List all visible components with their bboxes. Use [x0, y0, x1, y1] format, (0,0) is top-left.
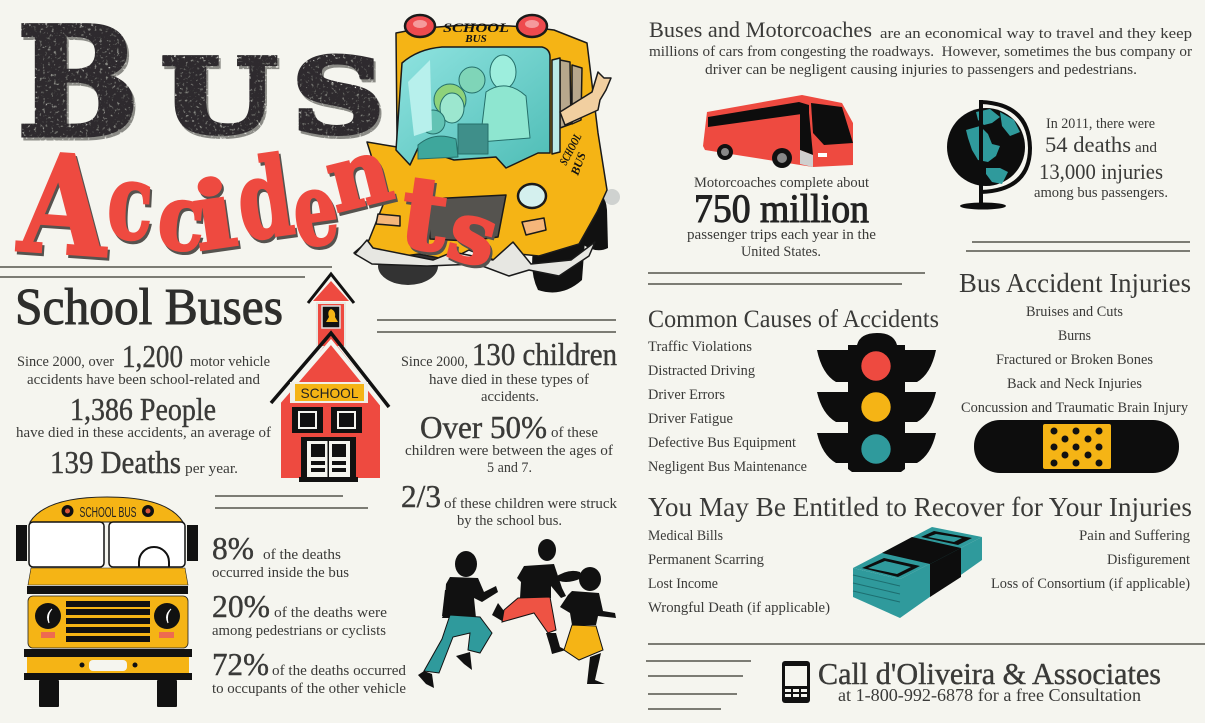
windshield with passengers: [396, 47, 550, 168]
list: injuries: Burns: [1058, 328, 1091, 344]
list: recoverable damages, left: [648, 528, 830, 616]
crumpled bumper: [355, 240, 595, 276]
text block: percentage of deaths: of the deaths occurred: [272, 663, 406, 679]
text block: percentage of deaths: 8%: [212, 530, 254, 566]
title: Accidents: i: [186, 159, 243, 272]
mirrors: [16, 525, 198, 561]
call to action: at 1-800-992-6878 for a free Consultation: [838, 685, 1141, 705]
headlight: [518, 184, 546, 208]
list: causes: Driver Fatigue: [648, 411, 733, 427]
list: recoverable damages, left: Medical Bills: [648, 528, 723, 544]
text block: motorcoach trips: [687, 175, 876, 260]
text block: intro paragraph: Buses and Motorcoaches: [649, 17, 872, 42]
child one: [418, 551, 498, 688]
text block: percentage of deaths: 20%: [212, 588, 270, 624]
text block: school accident statistics: accidents have been school-related and: [27, 372, 260, 388]
text block: school accident statistics: motor vehicle: [190, 354, 270, 370]
text block: 2011 bus statistics: [1034, 116, 1168, 201]
text block: children statistics: [401, 336, 617, 529]
letter B: B: [17, 0, 139, 171]
bus body: [354, 25, 607, 262]
title: Accidents: A: [13, 123, 116, 289]
title: Bus: [17, 0, 384, 171]
title: Accidents: n: [316, 116, 401, 232]
bus roof: [30, 497, 183, 522]
text block: children statistics: 2/3: [401, 478, 441, 514]
icon: stack of money: [853, 527, 982, 618]
text block: school accident statistics: Since 2000, over: [17, 354, 114, 370]
icon: running children: [418, 539, 616, 688]
text block: children statistics: by the school bus.: [457, 513, 562, 529]
text block: percentage of deaths: of the deaths were: [274, 605, 387, 621]
text block: children statistics: accidents.: [481, 389, 539, 405]
text block: percentage of deaths: 72%: [212, 646, 269, 682]
icon: front view of school bus: [16, 497, 198, 707]
title: Accidents: e: [285, 148, 345, 271]
list: recoverable damages, right: Pain and Suffering: [1079, 528, 1190, 544]
list: injuries: Fractured or Broken Bones: [996, 352, 1153, 368]
text block: percentage of deaths: of the deaths: [263, 547, 341, 563]
list: recoverable damages, left: Lost Income: [648, 576, 718, 592]
steeple: [308, 274, 354, 347]
roof lights: [405, 15, 547, 37]
title: Accidents: t: [394, 152, 456, 275]
text block: children statistics: of these: [551, 425, 598, 441]
text block: motorcoach trips: passenger trips each year in the: [687, 227, 876, 243]
building: [281, 338, 380, 478]
letter U: U: [161, 37, 277, 157]
text block: percentage of deaths: [212, 530, 406, 697]
side lettering: SCHOOL: [556, 131, 585, 167]
roof sign: [443, 20, 509, 45]
text block: school accident statistics: [16, 338, 271, 480]
icon: mobile phone: [782, 661, 810, 703]
title: Accidents: d: [229, 133, 300, 266]
windows: [292, 407, 362, 433]
text block: intro paragraph: are an economical way to travel and they keep: [880, 26, 1192, 42]
text block: school accident statistics: 139 Deaths: [50, 444, 181, 480]
text block: children statistics: Since 2000,: [401, 354, 468, 370]
list: recoverable damages, right: Loss of Consortium (if applicable): [991, 576, 1190, 592]
list: causes: Traffic Violations: [648, 339, 752, 355]
heading: Bus Accident Injuries: Bus Accident Injuries: [959, 268, 1191, 298]
heading: Common Causes of Accidents: Common Causes of Accidents: [648, 306, 939, 333]
bus wheels: [378, 189, 620, 292]
list: injuries: Bruises and Cuts: [1026, 304, 1123, 320]
text block: intro paragraph: [649, 17, 1192, 78]
side lettering: [556, 131, 589, 178]
side windows: [560, 60, 582, 128]
list: recoverable damages, left: Permanent Scarring: [648, 552, 764, 568]
text block: 2011 bus statistics: 54 deaths: [1045, 132, 1131, 157]
text block: 2011 bus statistics: among bus passengers.: [1034, 185, 1168, 201]
list: causes: [648, 339, 807, 475]
icon: traffic light: [817, 333, 936, 472]
icon: schoolhouse: [271, 274, 389, 482]
sign: [290, 382, 368, 403]
text block: school accident statistics: have died in these accidents, an average of: [16, 425, 271, 441]
text block: children statistics: 130 children: [472, 336, 617, 372]
list: causes: Distracted Driving: [648, 363, 755, 379]
list: recoverable damages, left: Wrongful Death (if applicable): [648, 600, 830, 616]
door: [299, 437, 358, 482]
text block: percentage of deaths: among pedestrians or cyclists: [212, 623, 386, 639]
text block: motorcoach trips: Motorcoaches complete about: [694, 175, 870, 191]
title: Accidents: c: [105, 139, 156, 264]
letter S: S: [292, 37, 384, 157]
text block: children statistics: 5 and 7.: [487, 460, 532, 476]
text block: school accident statistics: per year.: [185, 461, 238, 477]
heading: You May Be Entitled to Recover for Your Injuries: You May Be Entitled to Recover for Your Injuries: [648, 492, 1192, 522]
text block: children statistics: children were between the ages of: [405, 443, 613, 459]
list: injuries: Back and Neck Injuries: [1007, 376, 1142, 392]
tyres: [39, 680, 177, 707]
list: recoverable damages, right: Disfigurement: [1107, 552, 1191, 568]
list: injuries: Concussion and Traumatic Brain Injury: [961, 400, 1188, 416]
roof sign: SCHOOL: [443, 20, 509, 35]
sign: SCHOOL: [300, 385, 359, 401]
text block: motorcoach trips: 750 million: [694, 186, 869, 231]
text block: children statistics: Over 50%: [420, 409, 547, 445]
title: Accidents: s: [439, 179, 508, 287]
text block: 2011 bus statistics: In 2011, there were: [1046, 116, 1155, 132]
list: recoverable damages, right: [991, 528, 1191, 592]
roof sign: BUS: [464, 33, 487, 45]
list: causes: Driver Errors: [648, 387, 725, 403]
text block: school accident statistics: 1,386 People: [70, 391, 216, 427]
text block: children statistics: have died in these types of: [429, 372, 589, 388]
icon: bandage: [974, 420, 1179, 473]
front panel: [28, 596, 188, 648]
icon: globe: [947, 100, 1030, 210]
text block: percentage of deaths: occurred inside the bus: [212, 565, 349, 581]
text block: intro paragraph: millions of cars from congesting the roadways. However, sometimes the bus company or: [649, 44, 1192, 60]
call to action: Call d'Oliveira & Associates: [818, 656, 1161, 691]
heading: School Buses: School Buses: [15, 279, 283, 336]
text block: intro paragraph: driver can be negligent causing injuries to passengers and pedestrians.: [705, 62, 1137, 78]
icon: red motorcoach: [703, 95, 853, 168]
list: injuries: [961, 304, 1188, 416]
bus roof: SCHOOL BUS: [80, 504, 136, 521]
title: Accidents: c: [154, 163, 209, 273]
text block: 2011 bus statistics: and: [1135, 140, 1157, 156]
text block: school accident statistics: 1,200: [122, 338, 183, 374]
list: causes: Negligent Bus Maintenance: [648, 459, 807, 475]
title: Accidents: [13, 116, 508, 289]
child three: [554, 567, 616, 684]
grille: [428, 195, 506, 241]
list: causes: Defective Bus Equipment: [648, 435, 797, 451]
text block: percentage of deaths: to occupants of the other vehicle: [212, 681, 406, 697]
side lettering: BUS: [567, 150, 589, 178]
indicator lamps: [376, 214, 546, 235]
windshields: [29, 522, 185, 567]
text block: motorcoach trips: United States.: [741, 244, 821, 260]
bumper: [24, 649, 192, 680]
text block: 2011 bus statistics: 13,000 injuries: [1039, 159, 1163, 184]
child two: [492, 539, 566, 654]
illustration: crashed cartoon school bus: [354, 15, 620, 292]
text block: children statistics: of these children were struck: [444, 496, 617, 512]
waving hands: [560, 72, 611, 125]
